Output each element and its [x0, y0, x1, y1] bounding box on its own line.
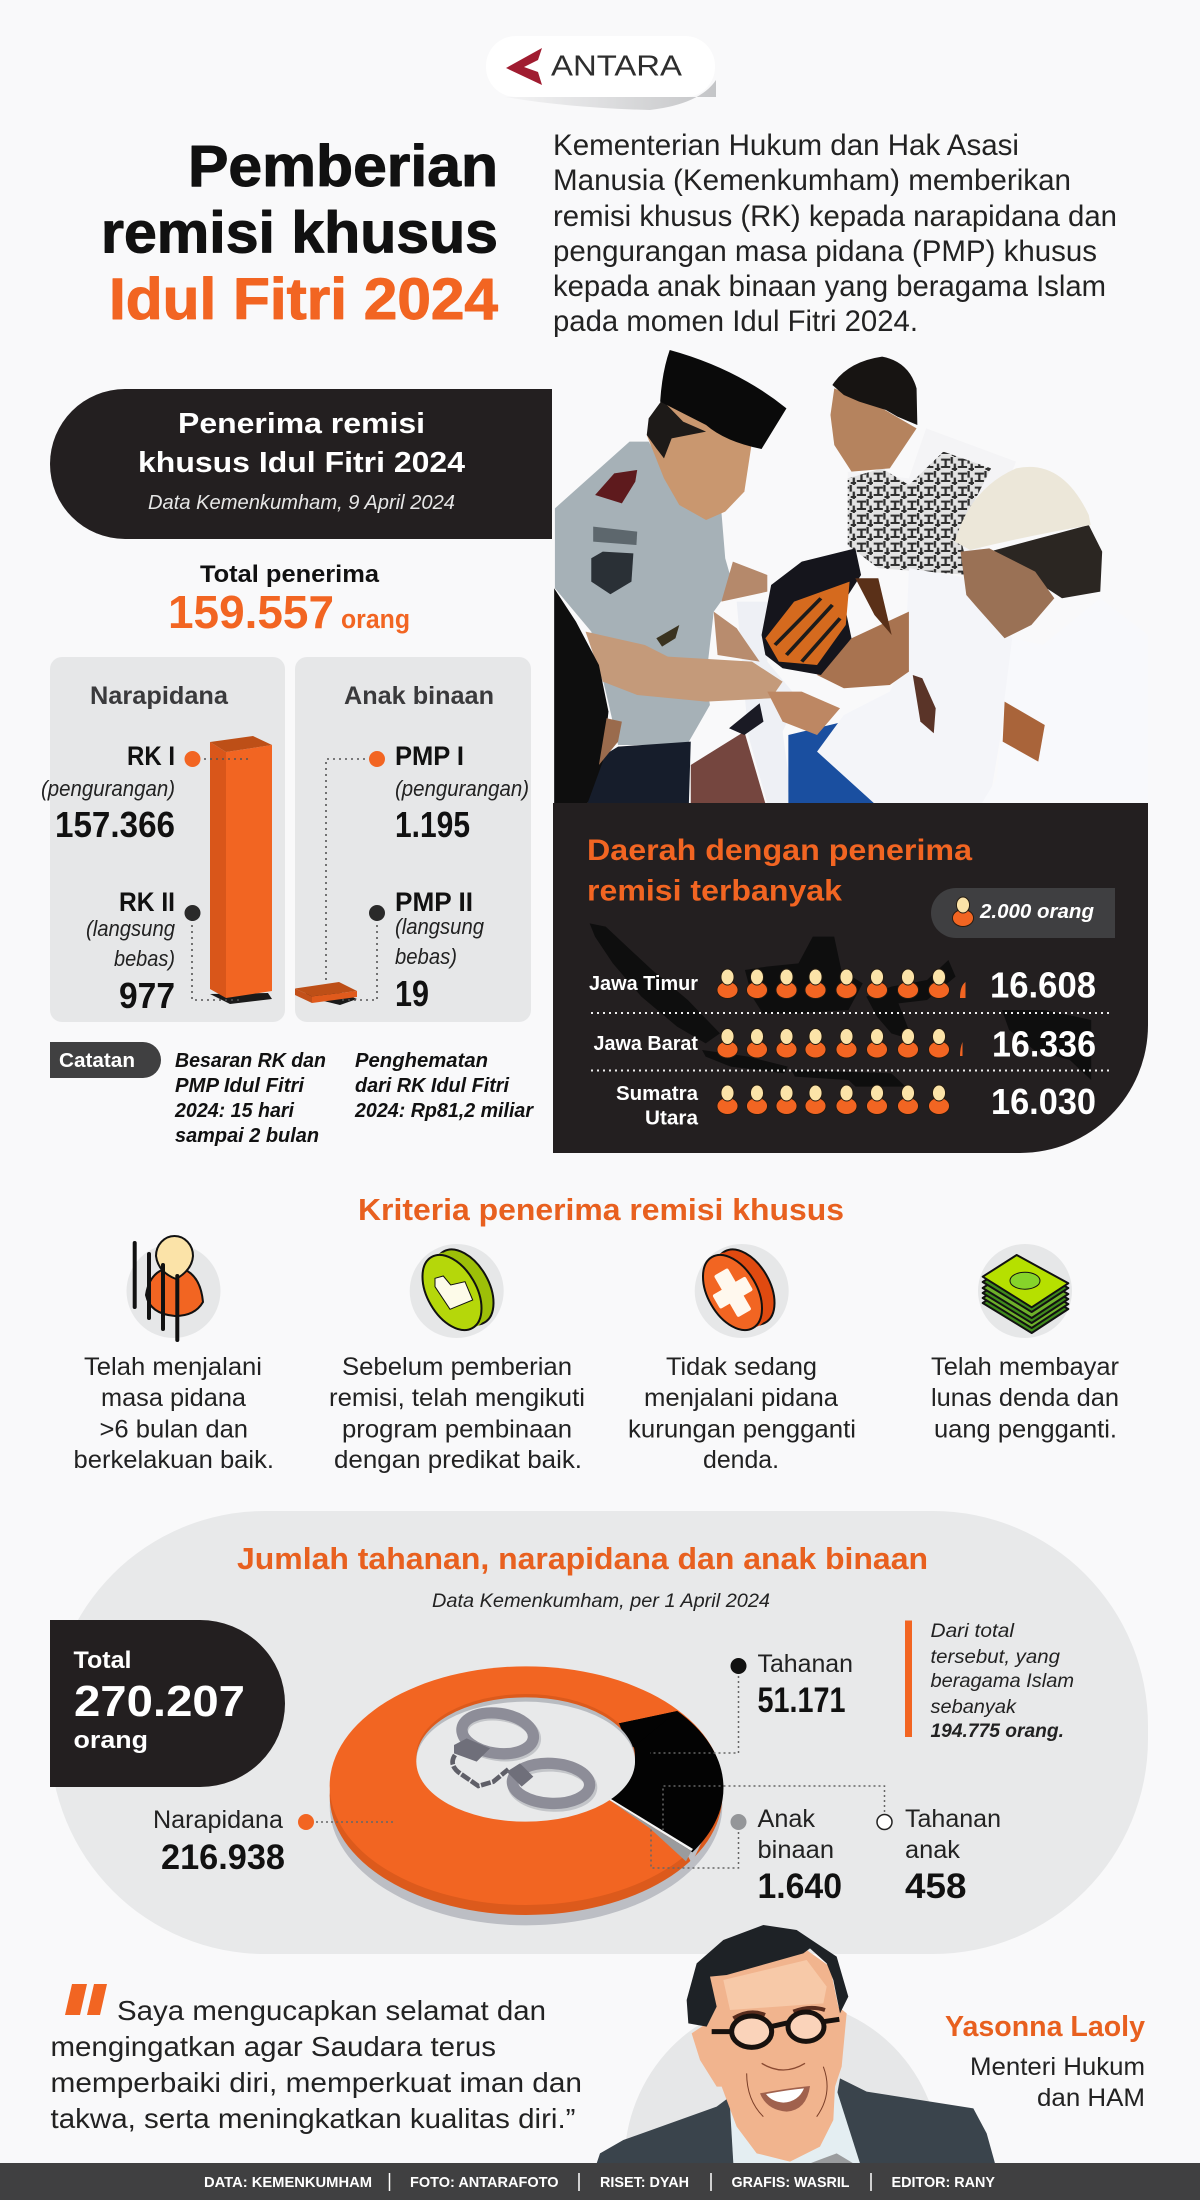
criterion 2: dengan predikat baik.: [334, 1446, 582, 1474]
criterion 4: uang pengganti.: [934, 1416, 1117, 1444]
criterion 2: Sebelum pemberian: [342, 1353, 572, 1381]
panel: anak binaan: [295, 657, 531, 1022]
criterion 1: berkelakuan baik.: [74, 1446, 274, 1474]
panel: detainee totals: [50, 1511, 1148, 1954]
label: narapidana: [153, 1806, 314, 1877]
row: Jawa Barat: 16.336: [992, 1024, 1096, 1064]
icon: quotation mark: [65, 1984, 107, 2015]
label: tahanan: Tahanan: [758, 1650, 853, 1678]
map: Indonesia silhouette: [590, 923, 1091, 1087]
notes: catatan: sampai 2 bulan: [175, 1125, 319, 1147]
panel: anak binaan: (langsung: [395, 914, 485, 939]
label: anak binaan: binaan: [758, 1836, 834, 1864]
panel: narapidana: (langsung: [86, 916, 176, 941]
row: Jawa Barat: Jawa Barat: [594, 1033, 698, 1055]
panel: narapidana: 157.366: [55, 804, 175, 845]
footer credits: DATA: KEMENKUMHAM: [204, 2174, 372, 2191]
row: Jawa Timur: Jawa Timur: [589, 973, 698, 995]
panel: narapidana: (pengurangan): [41, 776, 175, 801]
panel: recipients header: Penerima remisi: [178, 408, 425, 440]
label: tahanan anak: [877, 1805, 1001, 1906]
callout: muslim inmates: 194.775 orang.: [930, 1721, 1064, 1742]
notes: catatan: 2024: 15 hari: [174, 1100, 294, 1122]
intro paragraph: pengurangan masa pidana (PMP) khusus: [553, 235, 1097, 268]
panel: narapidana: 977: [119, 975, 175, 1016]
row: Jawa Timur: [589, 964, 1096, 1006]
panel: recipients header: [50, 389, 552, 539]
intro paragraph: Manusia (Kemenkumham) memberikan: [553, 164, 1071, 197]
label: anak binaan: Anak: [758, 1805, 816, 1833]
panel: anak binaan: (pengurangan): [395, 776, 529, 801]
callout: muslim inmates: sebanyak: [930, 1697, 1018, 1718]
footer credits: FOTO: ANTARAFOTO: [410, 2174, 559, 2191]
row: Sumatra Utara: [616, 1081, 1096, 1130]
total box: 270.207: [74, 1677, 245, 1726]
label: anak binaan: [730, 1805, 842, 1906]
label: anak binaan: 1.640: [758, 1867, 842, 1906]
row: Jawa Barat: [594, 1024, 1096, 1064]
heading: criteria: Kriteria penerima remisi khusus: [358, 1192, 844, 1227]
criterion 1: [74, 1236, 274, 1474]
callout: muslim inmates: tersebut, yang: [930, 1647, 1060, 1668]
callout: muslim inmates: Dari total: [930, 1621, 1015, 1642]
criterion 1: >6 bulan dan: [100, 1416, 248, 1444]
footer credits: [0, 2163, 1200, 2200]
speaker name: Menteri Hukum: [970, 2053, 1145, 2081]
logo: ANTARA: [486, 36, 716, 110]
total recipients: 159.557: [168, 586, 334, 638]
panel: anak binaan: bebas): [395, 944, 457, 969]
label: tahanan anak: Tahanan: [905, 1805, 1001, 1833]
label: tahanan anak: anak: [905, 1836, 960, 1864]
panel: narapidana: bebas): [114, 946, 175, 971]
speaker name: Yasonna Laoly: [945, 2011, 1145, 2043]
legend: 2.000 orang: 2.000 orang: [979, 901, 1094, 923]
panel: detainee totals: Data Kemenkumham, per 1 April 2024: [432, 1591, 770, 1612]
title: [101, 134, 498, 332]
criterion 4: [931, 1244, 1119, 1444]
criterion 2: remisi, telah mengikuti: [329, 1384, 585, 1412]
criterion 4: Telah membayar: [931, 1353, 1119, 1381]
notes: catatan: PMP Idul Fitri: [175, 1075, 304, 1097]
photo: officer greeting inmates: [554, 350, 1148, 804]
panel: narapidana: [41, 657, 285, 1022]
panel: narapidana: RK II: [119, 887, 175, 917]
quote: Saya mengucapkan selamat dan: [117, 1995, 546, 2026]
bar: PMP: [295, 982, 357, 1005]
bar: RK I: [210, 736, 272, 1004]
callout: muslim inmates: [905, 1620, 1074, 1742]
intro paragraph: kepada anak binaan yang beragama Islam: [553, 270, 1106, 303]
legend: 2.000 orang: [931, 888, 1115, 938]
total recipients: [168, 561, 410, 638]
title: remisi khusus: [101, 200, 498, 266]
panel: anak binaan: 1.195: [395, 804, 470, 845]
footer credits: GRAFIS: WASRIL: [732, 2174, 850, 2191]
panel: narapidana: Narapidana: [90, 682, 229, 710]
portrait: Yasonna Laoly: [597, 1925, 995, 2163]
icon: handcuffs: [453, 1709, 593, 1808]
quote: mengingatkan agar Saudara terus: [50, 2031, 496, 2062]
row: Jawa Timur: 16.608: [990, 964, 1096, 1006]
panel: top regions: remisi terbanyak: [587, 874, 842, 908]
notes: catatan: Catatan: [59, 1050, 135, 1072]
panel: anak binaan: PMP I: [395, 741, 464, 771]
intro paragraph: remisi khusus (RK) kepada narapidana dan: [553, 200, 1117, 233]
criterion 3: [628, 1239, 856, 1474]
total box: orang: [74, 1727, 148, 1754]
label: narapidana: Narapidana: [153, 1806, 283, 1834]
intro paragraph: pada momen Idul Fitri 2024.: [553, 305, 918, 338]
label: tahanan anak: 458: [905, 1867, 966, 1906]
criterion 2: program pembinaan: [342, 1416, 572, 1444]
panel: anak binaan: Anak binaan: [344, 682, 494, 710]
row: Sumatra Utara: 16.030: [991, 1081, 1096, 1122]
speaker name: dan HAM: [1037, 2084, 1145, 2112]
heading: jumlah: Jumlah tahanan, narapidana dan anak binaan: [237, 1541, 928, 1576]
notes: catatan: dari RK Idul Fitri: [355, 1075, 509, 1097]
panel: recipients header: khusus Idul Fitri 2024: [138, 447, 465, 479]
criterion 1: Telah menjalani: [84, 1353, 262, 1381]
criterion 3: denda.: [703, 1446, 779, 1474]
icon: money stack: [978, 1244, 1072, 1338]
quote: [50, 1984, 582, 2134]
criterion 1: masa pidana: [101, 1384, 246, 1412]
icon: orange cross coin: [691, 1239, 789, 1340]
criterion 3: Tidak sedang: [666, 1353, 817, 1381]
criterion 3: menjalani pidana: [644, 1384, 838, 1412]
title: Idul Fitri 2024: [109, 267, 498, 332]
total box: Total: [74, 1647, 132, 1674]
label: tahanan: [730, 1650, 853, 1720]
panel: anak binaan: 19: [395, 973, 429, 1014]
title: Pemberian: [188, 134, 498, 199]
total recipients: orang: [341, 604, 410, 634]
criterion 3: kurungan pengganti: [628, 1416, 856, 1444]
notes: catatan: 2024: Rp81,2 miliar: [354, 1100, 534, 1122]
notes: catatan: [50, 1042, 534, 1147]
quote: takwa, serta meningkatkan kualitas diri.”: [50, 2103, 576, 2134]
total recipients: Total penerima: [200, 561, 380, 588]
row: Sumatra Utara: Utara: [645, 1108, 699, 1130]
quote: memperbaiki diri, memperkuat iman dan: [50, 2067, 582, 2098]
intro paragraph: Kementerian Hukum dan Hak Asasi: [553, 129, 1019, 162]
icon: green like coin: [410, 1239, 506, 1340]
speaker name: [945, 2011, 1145, 2112]
panel: anak binaan: PMP II: [395, 887, 473, 917]
callout: muslim inmates: beragama Islam: [930, 1671, 1074, 1692]
panel: narapidana: RK I: [127, 741, 175, 771]
panel: recipients header: Data Kemenkumham, 9 April 2024: [148, 492, 455, 514]
footer credits: EDITOR: RANY: [892, 2174, 995, 2191]
notes: catatan: Penghematan: [355, 1050, 488, 1072]
total box: [50, 1620, 285, 1787]
icon: person behind bars: [126, 1236, 220, 1340]
donut chart: [330, 1666, 723, 1925]
notes: catatan: Besaran RK dan: [175, 1050, 326, 1072]
intro paragraph: [553, 129, 1117, 338]
footer credits: RISET: DYAH: [600, 2174, 689, 2191]
criterion 4: lunas denda dan: [931, 1384, 1119, 1412]
label: narapidana: 216.938: [161, 1838, 285, 1877]
criterion 2: [329, 1239, 585, 1474]
label: tahanan: 51.171: [758, 1681, 846, 1720]
panel: top regions: Daerah dengan penerima: [587, 834, 972, 867]
panel: top regions: [553, 803, 1148, 1153]
logo: ANTARA: ANTARA: [551, 50, 683, 82]
row: Sumatra Utara: Sumatra: [616, 1083, 699, 1105]
